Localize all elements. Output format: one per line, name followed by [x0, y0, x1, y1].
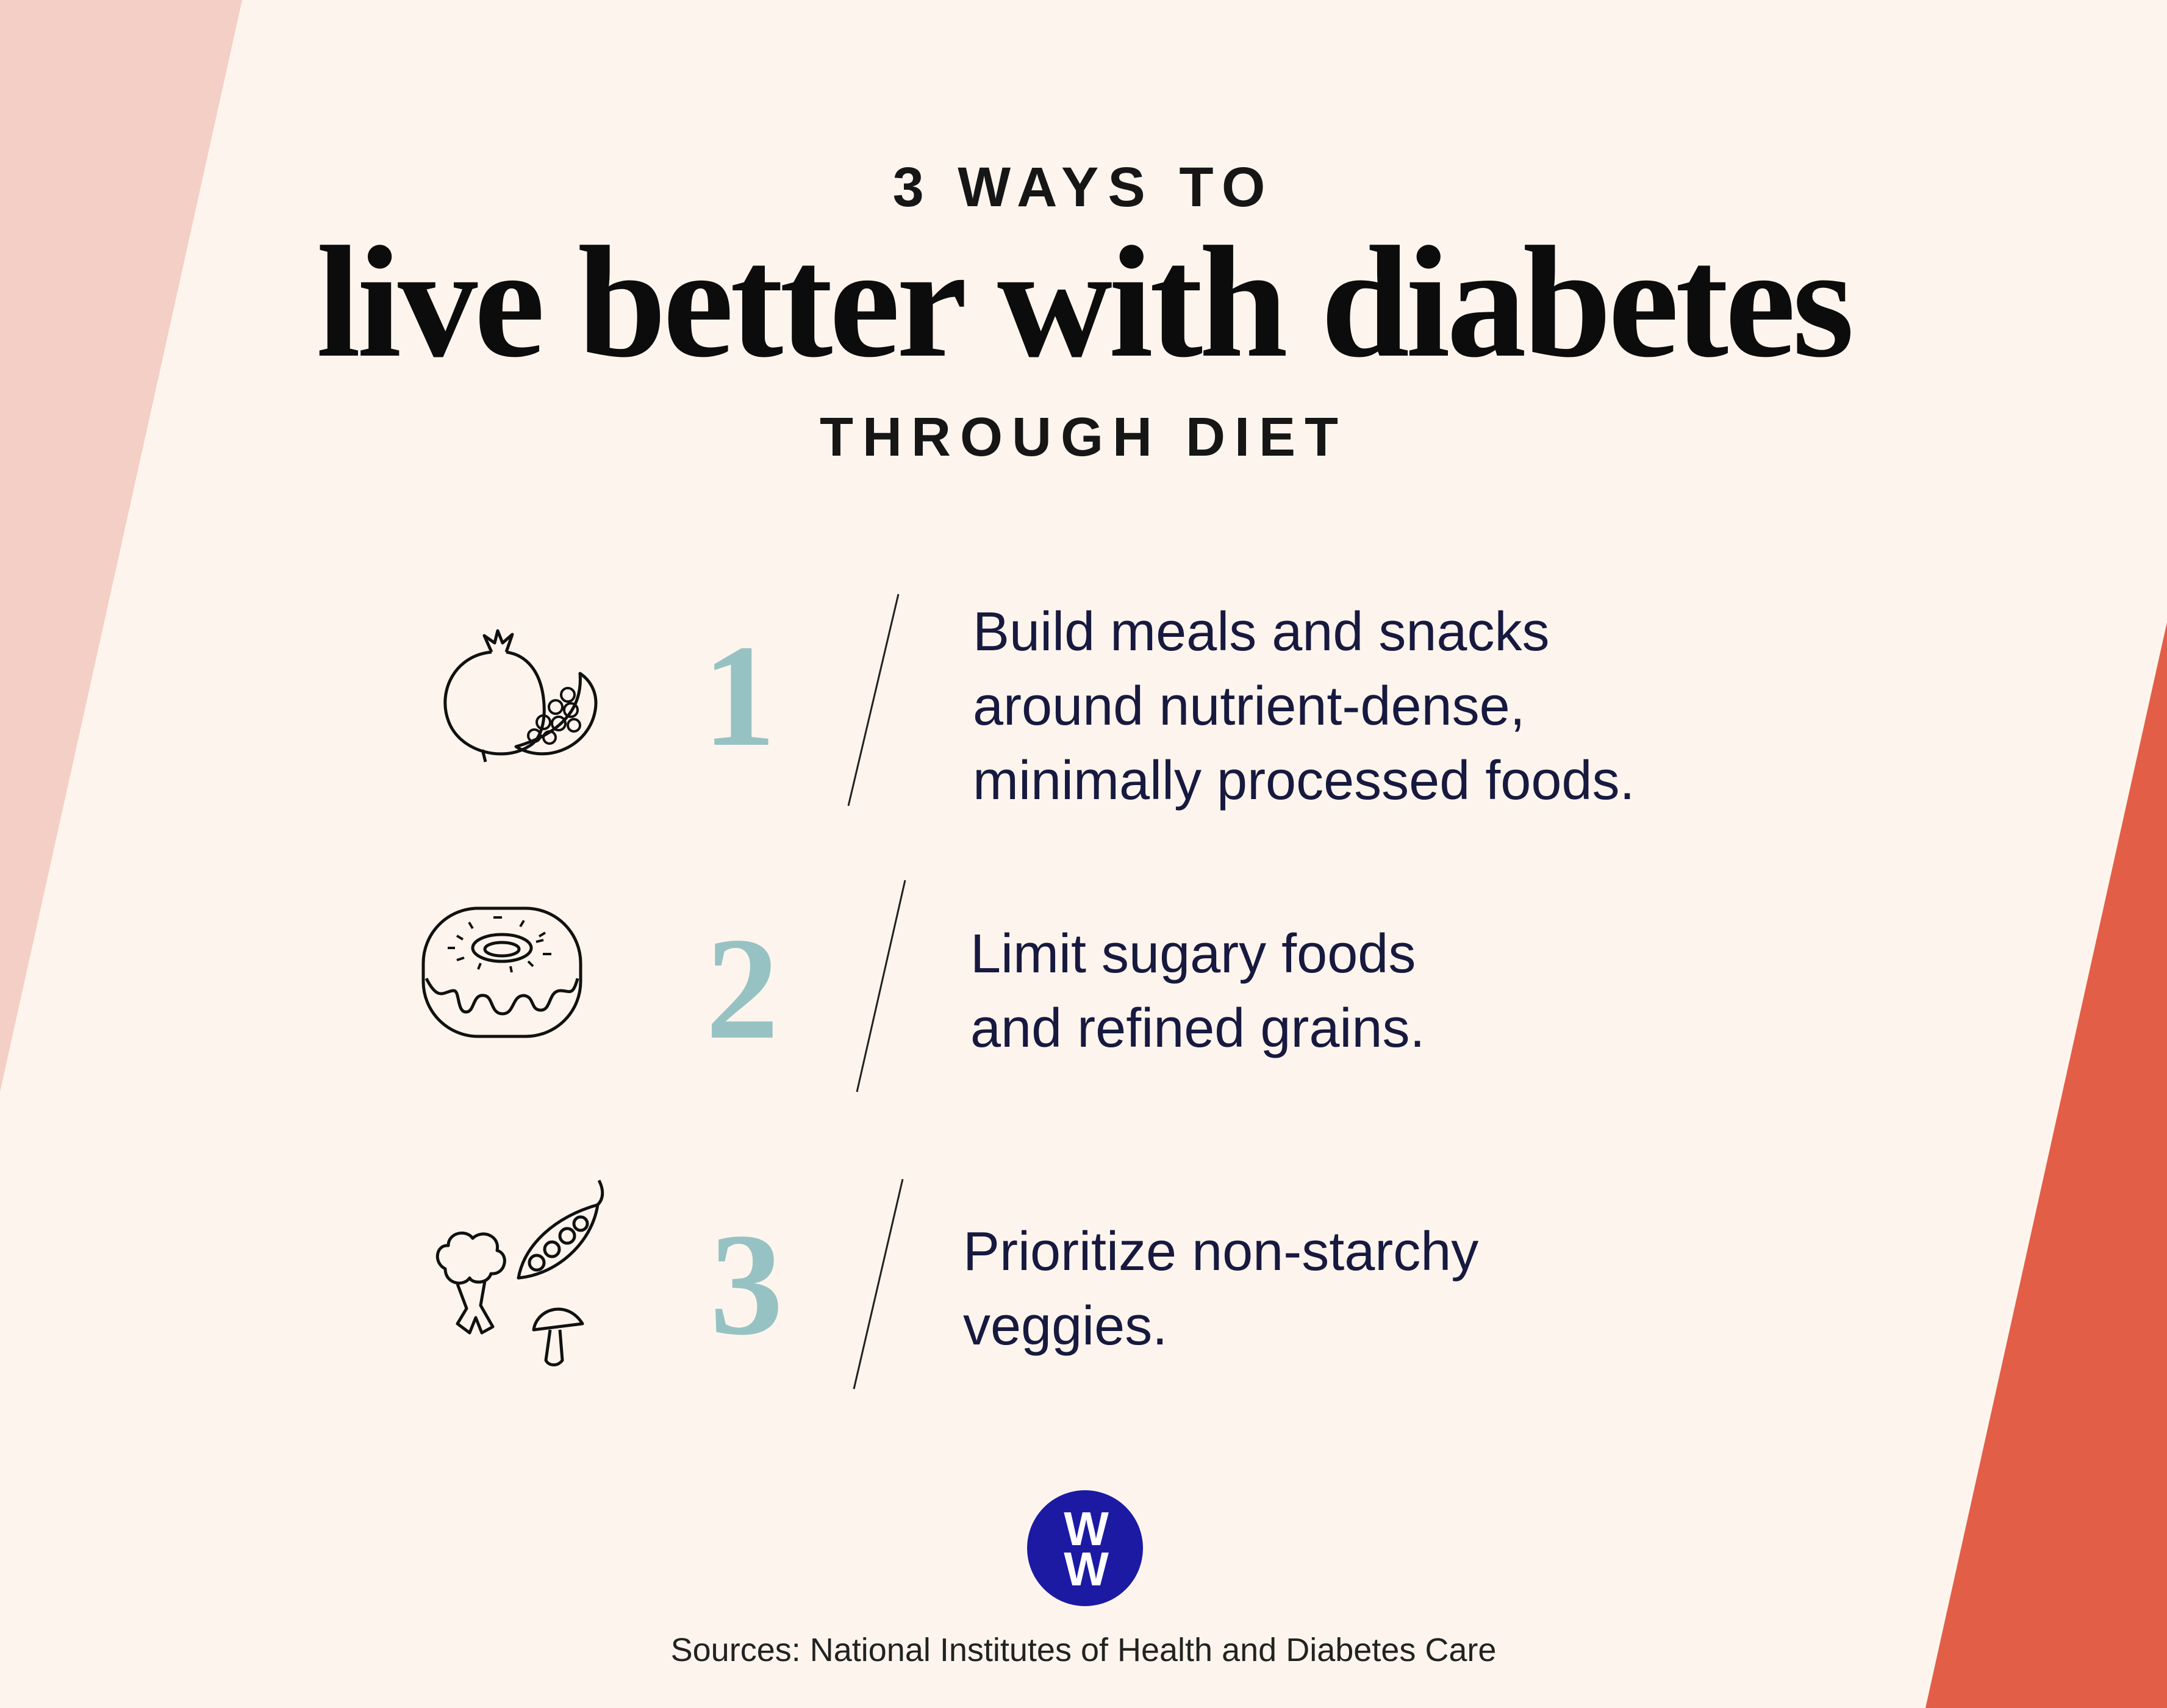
text 1: around nutrient-dense,: [973, 676, 1525, 737]
logo: WW: [1027, 1490, 1143, 1606]
row 3: [435, 1180, 1478, 1366]
subtitle: through diet: THROUGH DIET: [820, 407, 1347, 468]
text 2: [970, 924, 1425, 1059]
text 1: [973, 601, 1635, 811]
text 3: Prioritize non-starchy: [963, 1221, 1478, 1282]
number 3: 3: [710, 1203, 783, 1365]
text 3: veggies.: [963, 1296, 1167, 1357]
sources: Sources: National Institutes of Health and Diabetes Care: [671, 1632, 1496, 1668]
logo: WW: W: [1064, 1542, 1106, 1596]
text 2: Limit sugary foods: [970, 924, 1416, 985]
text 2: and refined grains.: [970, 998, 1425, 1059]
logo: WW: W: [1064, 1502, 1106, 1556]
number 2: 2: [706, 907, 779, 1069]
icon: vegetables: [435, 1180, 604, 1366]
text 1: minimally processed foods.: [973, 750, 1635, 811]
number 1: 1: [703, 614, 776, 777]
icon: donut: [422, 906, 582, 1038]
row 2: [422, 906, 1425, 1069]
kicker: 3 ways to: 3 WAYS TO: [893, 156, 1274, 218]
icon: pomegranate: [443, 630, 598, 762]
text 3: [963, 1221, 1478, 1357]
text 1: Build meals and snacks: [973, 601, 1549, 662]
row 1: [443, 601, 1635, 811]
title: live better with diabetes: [317, 214, 1850, 390]
